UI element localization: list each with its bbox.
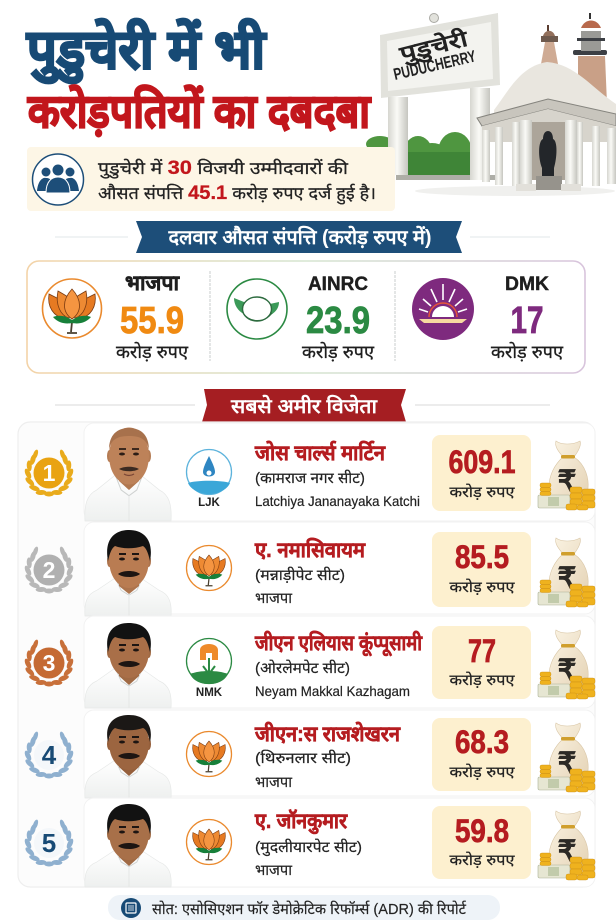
section banner: party-wise assets bbox=[55, 221, 550, 253]
illustration: Puducherry sign and monument bbox=[366, 13, 616, 196]
party logo LJK: LJK bbox=[198, 497, 221, 509]
name and seat bbox=[254, 630, 423, 699]
party logo BJP bbox=[186, 546, 232, 590]
icon: money bag bbox=[538, 441, 595, 510]
winner 5 bbox=[23, 798, 595, 887]
party logo BJP bbox=[186, 732, 232, 776]
statement line 2: औसत संपत्ति 45.1 करोड़ रुपए दर्ज हुई है। bbox=[98, 183, 376, 205]
panel: richest winners list bbox=[18, 422, 595, 887]
name and seat: जीएन:स राजशेखरन bbox=[254, 721, 401, 746]
asset value: 68.3 bbox=[455, 724, 509, 760]
party: BJP: 55.9 bbox=[120, 300, 184, 342]
photo bbox=[85, 804, 171, 887]
name and seat: ए. जॉनकुमार bbox=[254, 809, 348, 835]
section banner: richest winners bbox=[55, 389, 550, 422]
name and seat: (थिरुनलार सीट) bbox=[255, 749, 351, 767]
winner 2 bbox=[23, 522, 595, 616]
asset value: करोड़ रुपए bbox=[450, 483, 515, 501]
party logo LJK bbox=[186, 450, 232, 509]
icon: money bag bbox=[538, 538, 595, 607]
rank medal 4: 4 bbox=[42, 740, 57, 770]
icon: document bbox=[121, 898, 141, 918]
name and seat: भाजपा bbox=[255, 862, 293, 879]
asset value: 77 bbox=[468, 633, 496, 669]
right tower bbox=[578, 56, 607, 104]
party: AINRC bbox=[227, 273, 375, 362]
statue bbox=[539, 131, 556, 176]
party logo NMK: NMK bbox=[196, 687, 223, 699]
winner 3 bbox=[23, 616, 595, 708]
source text: सोत: एसोसिएशन फॉर डेमोक्रेटिक रिफॉर्म्स (ADR) की रिपोर्ट bbox=[152, 900, 467, 918]
small tower bbox=[541, 42, 558, 64]
party: BJP: भाजपा bbox=[125, 272, 181, 295]
roof bbox=[477, 99, 616, 126]
name and seat: जीएन एलियास कूंप्पूसामी bbox=[254, 630, 423, 657]
party: DMK bbox=[412, 273, 564, 362]
asset value: 59.8 bbox=[455, 813, 509, 849]
illustration: Puducherry sign and monument: PUDUCHERRY bbox=[392, 47, 478, 84]
asset value: करोड़ रुपए bbox=[450, 851, 515, 869]
party: BJP: करोड़ रुपए bbox=[116, 341, 189, 362]
name and seat bbox=[254, 721, 401, 791]
asset value bbox=[432, 435, 531, 511]
name and seat: Latchiya Jananayaka Katchi bbox=[255, 493, 420, 509]
asset value: करोड़ रुपए bbox=[450, 763, 515, 781]
title line 1: पुडुचेरी में भी bbox=[26, 18, 267, 84]
panel: party averages bbox=[27, 261, 585, 373]
rank medal 3 bbox=[23, 639, 75, 686]
party: DMK: करोड़ रुपए bbox=[491, 341, 564, 362]
rank medal 2 bbox=[23, 546, 75, 594]
name and seat bbox=[254, 537, 366, 607]
source footer bbox=[108, 895, 500, 920]
name and seat: भाजपा bbox=[255, 590, 293, 607]
name and seat: भाजपा bbox=[255, 774, 293, 791]
rank medal 4 bbox=[23, 731, 75, 778]
name and seat: जोस चार्ल्स मार्टिन bbox=[254, 440, 386, 465]
party logo BJP bbox=[186, 820, 232, 864]
section banner: party-wise assets: दलवार औसत संपत्ति (करोड़ रुपए में) bbox=[168, 225, 432, 249]
asset value: करोड़ रुपए bbox=[450, 671, 515, 689]
sign posts bbox=[388, 97, 408, 175]
party: AINRC: 23.9 bbox=[306, 300, 370, 342]
party: BJP bbox=[42, 272, 189, 362]
rank medal 5: 5 bbox=[42, 828, 56, 858]
icon: people group bbox=[32, 154, 84, 205]
panel: average assets statement bbox=[27, 147, 395, 211]
name and seat: (मन्नाड़ीपेट सीट) bbox=[255, 566, 345, 584]
statement line 1: पुडुचेरी में 30 विजयी उम्मीदवारों की bbox=[98, 158, 349, 179]
section banner: richest winners: सबसे अमीर विजेता bbox=[230, 394, 378, 418]
photo bbox=[85, 715, 171, 798]
name and seat: Neyam Makkal Kazhagam bbox=[255, 683, 410, 699]
trees bbox=[366, 132, 472, 176]
asset value bbox=[432, 626, 531, 699]
name and seat: ए. नमासिवायम bbox=[254, 537, 366, 562]
winner 1 bbox=[23, 423, 595, 521]
party: AINRC: AINRC bbox=[308, 273, 368, 295]
photo bbox=[85, 623, 171, 708]
party: DMK: 17 bbox=[510, 300, 544, 342]
photo bbox=[85, 428, 171, 521]
photo bbox=[85, 530, 171, 616]
name and seat: (मुदलीयारपेट सीट) bbox=[255, 838, 362, 857]
icon: money bag bbox=[538, 723, 595, 792]
name and seat bbox=[254, 809, 362, 879]
icon: money bag bbox=[538, 811, 595, 880]
title line 2: करोड़पतियों का दबदबा bbox=[27, 85, 372, 137]
rank medal 2: 2 bbox=[43, 557, 55, 583]
asset value bbox=[432, 806, 531, 879]
asset value: 609.1 bbox=[448, 444, 516, 480]
icon: money bag bbox=[538, 630, 595, 699]
asset value: 85.5 bbox=[455, 539, 509, 575]
party logo NMK bbox=[186, 638, 232, 699]
party: DMK: DMK bbox=[505, 273, 549, 295]
asset value bbox=[432, 532, 531, 607]
name and seat bbox=[254, 440, 420, 509]
sign board bbox=[380, 13, 500, 98]
dome bbox=[494, 62, 616, 118]
winner 4 bbox=[23, 710, 595, 798]
asset value bbox=[432, 718, 531, 791]
rank medal 3: 3 bbox=[43, 650, 55, 676]
party: AINRC: करोड़ रुपए bbox=[302, 341, 375, 362]
name and seat: (कामराज नगर सीट) bbox=[255, 469, 365, 487]
rank medal 1: 1 bbox=[43, 460, 56, 486]
name and seat: (ओरलेमपेट सीट) bbox=[255, 659, 350, 677]
sign text: पुडुचेरी bbox=[396, 25, 472, 69]
rank medal 1 bbox=[23, 449, 75, 496]
rank medal 5 bbox=[23, 819, 75, 866]
columns bbox=[482, 120, 616, 190]
asset value: करोड़ रुपए bbox=[450, 578, 515, 596]
